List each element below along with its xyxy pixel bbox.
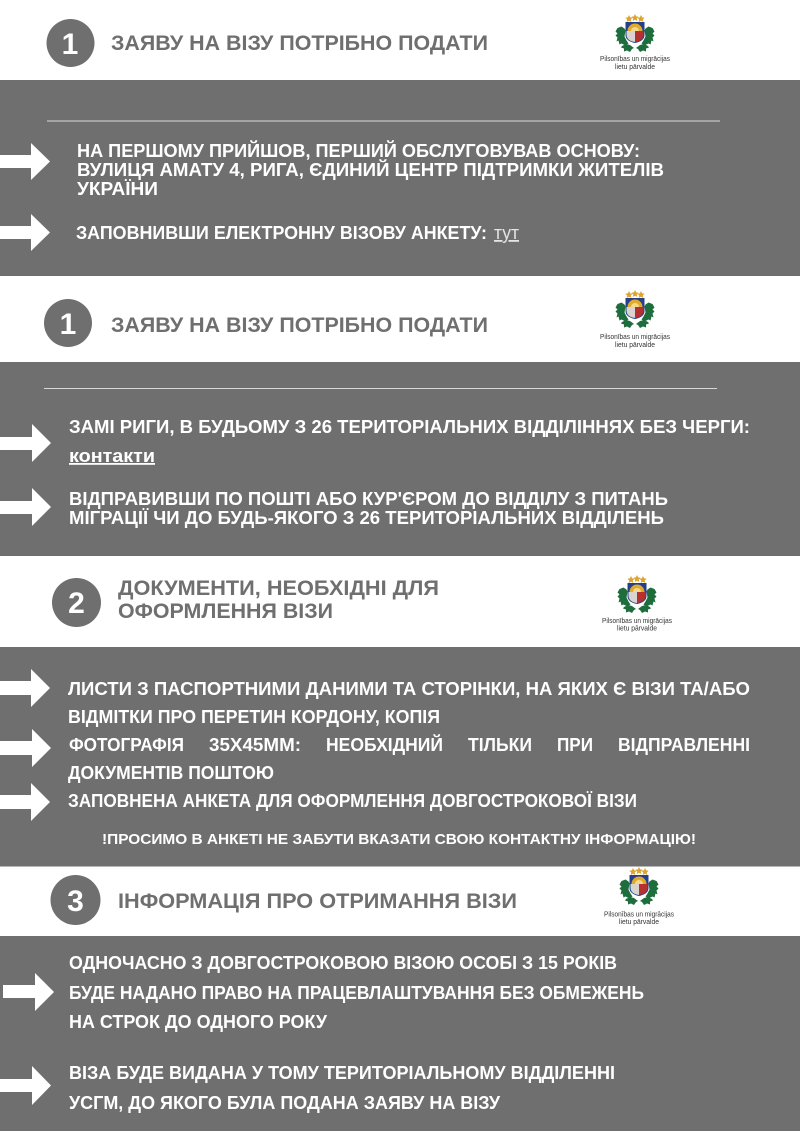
panel: section 1 header	[0, 0, 800, 80]
text block: right to work	[69, 953, 644, 1032]
arrow	[3, 973, 54, 1011]
text block: right to work: ОДНОЧАСНО З ДОВГОСТРОКОВОЮ ВІЗОЮ ОСОБІ З 15 РОКІВ	[69, 953, 617, 973]
heading: section 1: ЗАЯВУ НА ВІЗУ ПОТРІБНО ПОДАТИ	[111, 32, 488, 55]
panel: section 1 continued header	[0, 276, 800, 362]
text block: by post: ВІДПРАВИВШИ ПО ПОШТІ АБО КУР'ЄРОМ ДО ВІДДІЛУ З ПИТАНЬ	[69, 489, 668, 509]
arrow	[0, 424, 51, 462]
text block: passport pages: ВІДМІТКИ ПРО ПЕРЕТИН КОРДОНУ, КОПІЯ	[68, 707, 440, 727]
text block: passport pages: ЛИСТИ З ПАСПОРТНИМИ ДАНИМИ ТА СТОРІНКИ, НА ЯКИХ Є ВІЗИ ТА/АБО	[68, 679, 750, 699]
arrow	[0, 488, 51, 526]
heading: section 1 continued: ЗАЯВУ НА ВІЗУ ПОТРІБНО ПОДАТИ	[111, 314, 488, 337]
panel: section 2 body	[0, 647, 800, 866]
number badge 2: 2	[68, 587, 85, 620]
text block: first come first served: НА ПЕРШОМУ ПРИЙШОВ, ПЕРШИЙ ОБСЛУГОВУВАВ ОСНОВУ:	[77, 140, 640, 161]
logo: migration office: Pilsonības un migrācijas	[600, 56, 670, 63]
text block: photo: ТІЛЬКИ	[468, 735, 532, 755]
text block: photo: НЕОБХІДНИЙ	[326, 734, 443, 755]
text block: where the visa is issued: УСГМ, ДО ЯКОГО БУЛА ПОДАНА ЗАЯВУ НА ВІЗУ	[69, 1093, 501, 1113]
number badge 1: 1	[62, 28, 78, 61]
panel: section 3 header	[0, 866, 800, 936]
logo: migration office: lietu pārvalde	[619, 919, 659, 926]
panel: section 1 body	[0, 80, 800, 276]
text block: where the visa is issued	[69, 1063, 615, 1113]
logo: migration office: Pilsonības un migrācijas	[602, 618, 672, 625]
logo: migration office: lietu pārvalde	[615, 64, 655, 71]
text block: photo	[68, 734, 750, 783]
text block: application form: ЗАПОВНЕНА АНКЕТА ДЛЯ ОФОРМЛЕННЯ ДОВГОСТРОКОВОЇ ВІЗИ	[68, 791, 637, 811]
text block: right to work: НА СТРОК ДО ОДНОГО РОКУ	[69, 1012, 328, 1032]
text block: by post	[69, 489, 668, 528]
number badge 3	[50, 875, 100, 925]
text block: photo: ПРИ	[557, 735, 593, 755]
logo: migration office	[604, 867, 674, 926]
text block: outside Riga: контакти	[69, 446, 155, 466]
callout: contact information reminder: !ПРОСИМО В АНКЕТІ НЕ ЗАБУТИ ВКАЗАТИ СВОЮ КОНТАКТНУ ІНФОРМАЦІЮ!	[102, 831, 696, 848]
logo: migration office	[600, 290, 670, 349]
text block: online form: ЗАПОВНИВШИ ЕЛЕКТРОННУ ВІЗОВУ АНКЕТУ:	[76, 223, 487, 243]
arrow	[0, 783, 50, 821]
text block: first come first served: ВУЛИЦЯ АМАТУ 4, РИГА, ЄДИНИЙ ЦЕНТР ПІДТРИМКИ ЖИТЕЛІВ	[77, 159, 664, 180]
text block: first come first served: УКРАЇНИ	[77, 179, 158, 199]
number badge 3: 3	[67, 885, 84, 918]
heading: section 2	[118, 577, 439, 623]
panel: section 1 continued body	[0, 362, 800, 556]
text block: by post: МІГРАЦІЇ ЧИ ДО БУДЬ-ЯКОГО З 26 ТЕРИТОРІАЛЬНИХ ВІДДІЛЕНЬ	[69, 508, 664, 528]
text block: first come first served	[77, 140, 664, 199]
logo: migration office: lietu pārvalde	[615, 342, 655, 349]
arrow	[0, 214, 50, 251]
text block: online form: тут	[494, 223, 519, 243]
text block: photo: ДОКУМЕНТІВ ПОШТОЮ	[68, 763, 274, 783]
number badge 1	[44, 299, 92, 347]
arrow	[0, 1066, 51, 1105]
arrow	[0, 729, 51, 767]
text block: passport pages	[68, 679, 750, 727]
logo: migration office: Pilsonības un migrācijas	[600, 334, 670, 341]
number badge 2	[52, 578, 101, 627]
text block: photo: 35Х45ММ:	[209, 735, 301, 755]
heading: section 2: ОФОРМЛЕННЯ ВІЗИ	[118, 600, 333, 623]
text block: photo: ФОТОГРАФІЯ	[69, 735, 184, 755]
panel: section 3 body	[0, 936, 800, 1131]
logo: migration office: Pilsonības un migrācijas	[604, 912, 674, 918]
text block: where the visa is issued: ВІЗА БУДЕ ВИДАНА У ТОМУ ТЕРИТОРІАЛЬНОМУ ВІДДІЛЕННІ	[69, 1063, 615, 1083]
panel: section 2 header	[0, 556, 800, 647]
number badge 1: 1	[60, 308, 76, 341]
logo: migration office: lietu pārvalde	[617, 626, 657, 632]
heading: section 2: ДОКУМЕНТИ, НЕОБХІДНІ ДЛЯ	[118, 577, 439, 600]
number badge 1	[46, 19, 94, 67]
logo: migration office	[602, 575, 672, 632]
text block: photo: ВІДПРАВЛЕННІ	[618, 735, 750, 755]
text block: outside Riga	[69, 417, 750, 466]
text block: outside Riga: ЗАМІ РИГИ, В БУДЬОМУ З 26 ТЕРИТОРІАЛЬНИХ ВІДДІЛІННЯХ БЕЗ ЧЕРГИ:	[69, 417, 750, 437]
logo: migration office	[600, 14, 670, 71]
arrow	[0, 669, 50, 707]
heading: section 3: ІНФОРМАЦІЯ ПРО ОТРИМАННЯ ВІЗИ	[118, 890, 517, 913]
arrow	[0, 143, 50, 180]
text block: right to work: БУДЕ НАДАНО ПРАВО НА ПРАЦЕВЛАШТУВАННЯ БЕЗ ОБМЕЖЕНЬ	[69, 983, 644, 1003]
